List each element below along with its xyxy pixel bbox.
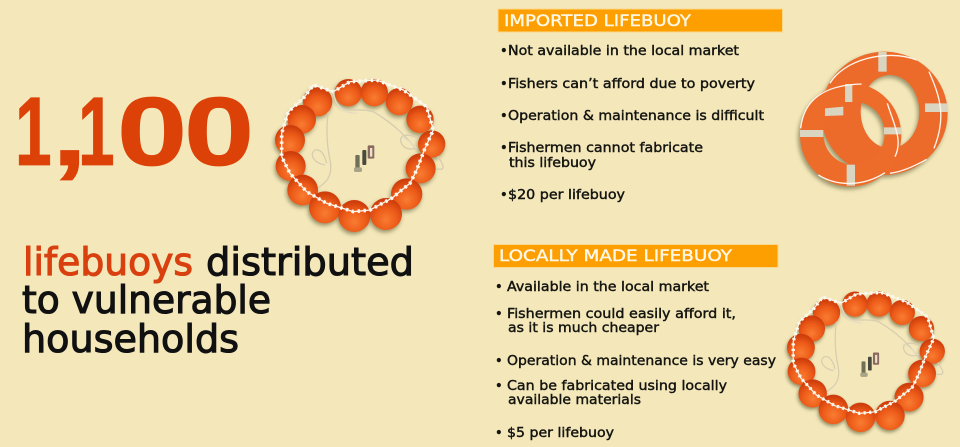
list: locally made lifebuoy points: $5 per lifebuoy (507, 426, 614, 441)
list: locally made lifebuoy points: as it is much cheaper (508, 321, 660, 336)
headline number (15, 77, 254, 186)
icon: locally made bead lifebuoy (786, 292, 945, 434)
icon: imported orange lifebuoys (798, 52, 948, 189)
list: locally made lifebuoy points: Operation & maintenance is very easy (507, 354, 776, 369)
list: imported lifebuoy points: • (500, 141, 508, 156)
heading: imported lifebuoy: IMPORTED LIFEBUOY (504, 11, 691, 30)
small ring (800, 83, 901, 187)
list: imported lifebuoy points: Fishers can’t afford due to poverty (508, 77, 755, 92)
list: locally made lifebuoy points: Available in the local market (507, 280, 709, 295)
heading: imported lifebuoy (498, 9, 782, 32)
list: imported lifebuoy points: • (500, 109, 508, 124)
list: locally made lifebuoy points: • (495, 379, 503, 394)
list: imported lifebuoy points: Not available in the local market (508, 44, 739, 59)
headline caption (22, 240, 414, 361)
list: locally made lifebuoy points: Fishermen could easily afford it, (507, 307, 736, 322)
list: locally made lifebuoy points (495, 280, 776, 441)
list: locally made lifebuoy points: • (495, 307, 503, 322)
headline number: 1 (15, 77, 52, 186)
icon: bead lifebuoy (274, 79, 445, 234)
list: imported lifebuoy points: $20 per lifebuoy (508, 188, 625, 203)
panel: locally made lifebuoy (494, 244, 778, 441)
list: imported lifebuoy points: • (500, 44, 508, 59)
list: imported lifebuoy points: • (500, 188, 508, 203)
list: locally made lifebuoy points: • (495, 426, 503, 441)
heading: locally made lifebuoy: LOCALLY MADE LIFEBUOY (499, 246, 732, 265)
list: locally made lifebuoy points: • (495, 280, 503, 295)
panel: imported lifebuoy (498, 9, 782, 203)
headline number: 0 (184, 77, 254, 186)
headline number: 1 (78, 77, 115, 186)
list: imported lifebuoy points: • (500, 77, 508, 92)
heading: locally made lifebuoy (494, 244, 778, 268)
headline number: , (52, 77, 87, 186)
list: imported lifebuoy points: this lifebuoy (509, 156, 596, 171)
large ring (821, 52, 948, 175)
headline number: 0 (117, 77, 187, 186)
list: imported lifebuoy points: Operation & maintenance is difficult (508, 109, 764, 124)
headline caption: households (22, 317, 239, 361)
list: locally made lifebuoy points: • (495, 354, 503, 369)
list: imported lifebuoy points (500, 44, 764, 203)
list: imported lifebuoy points: Fishermen cannot fabricate (508, 141, 703, 156)
list: locally made lifebuoy points: available materials (508, 393, 641, 408)
list: locally made lifebuoy points: Can be fabricated using locally (507, 379, 727, 394)
headline caption: to vulnerable (22, 278, 271, 322)
headline caption: distributed (206, 240, 414, 284)
headline caption: lifebuoys (23, 240, 193, 284)
